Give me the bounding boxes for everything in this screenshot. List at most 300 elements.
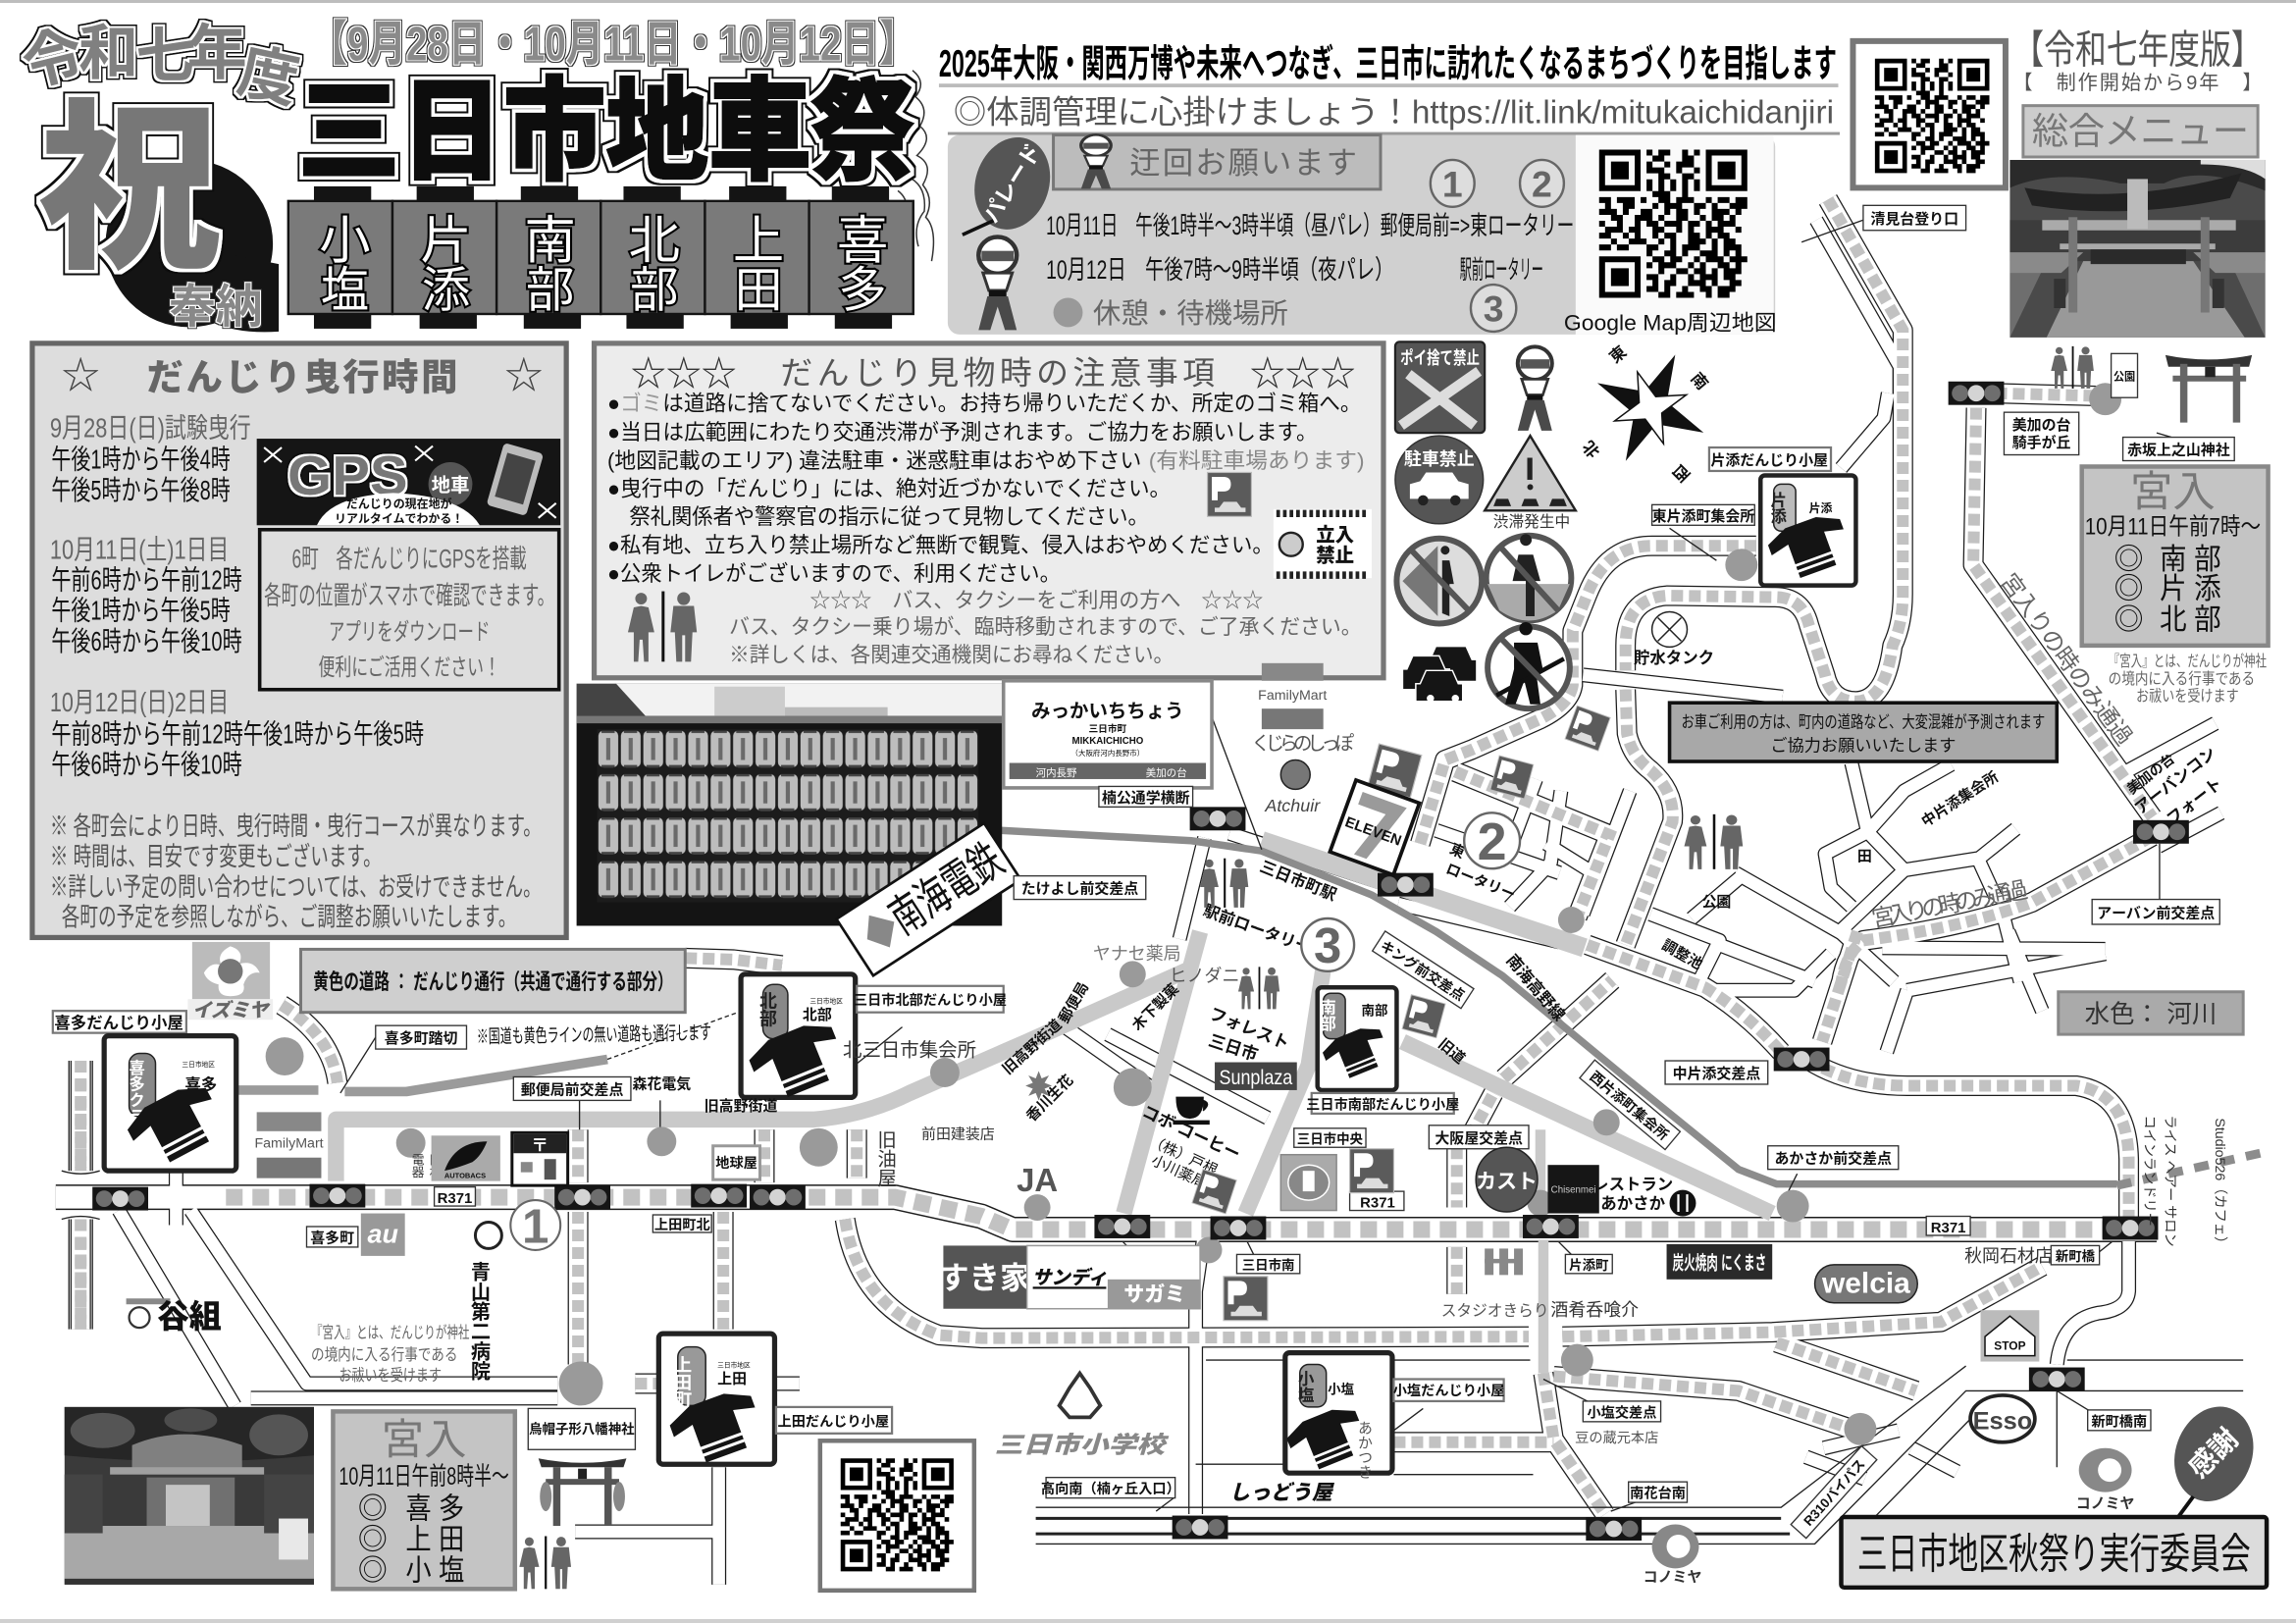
logo: Izumiya: イズミヤ [192, 999, 271, 1021]
panel: miyairi, Nanbu Katazoe Hokubu: ◎ [2114, 603, 2143, 636]
header: six town lanterns: 喜 [837, 213, 888, 270]
header: reiwa 7 arched title: 度 [233, 37, 305, 115]
map: right side labels: 中片添集会所 [1918, 767, 2002, 830]
icon: Akasaka restroom [2051, 346, 2094, 389]
map: central shops and labels: 豆の蔵元本店 [1575, 1431, 1658, 1446]
icon: station restroom [1200, 859, 1248, 908]
map: central shops and labels: 新町橋 [2056, 1248, 2096, 1264]
precautions list: ●曳行中の「だんじり」には、絶対近づかないでください。 [607, 476, 1171, 500]
sign: no entry [1274, 509, 1372, 578]
precautions list: 祭礼関係者や警察官の指示に従って見物してください。 [629, 504, 1149, 529]
labels: rotated map boxes: 南海高野線 [1502, 951, 1569, 1025]
card: Nanbu danjiri: 南部 [1318, 999, 1336, 1031]
map: right side labels: 東片添町集会所 [1652, 507, 1754, 525]
header: six town lanterns: 片 [420, 213, 472, 270]
callout: traffic warning: ご協力お願いいたします [1770, 736, 1956, 756]
map: central shops and labels: しっどう屋 [1229, 1482, 1335, 1504]
GPS info box: 6町 各だんじりにGPSを搭載 [292, 545, 527, 574]
logo: Chikyuya: 地球屋 [715, 1155, 757, 1172]
icon: parade fan [963, 128, 1062, 239]
circled route numbers: 3 [1484, 288, 1504, 329]
schedule title: ☆ [62, 355, 100, 397]
labels: station area: 三日市町駅 [1257, 857, 1339, 905]
card: Kita danjiri: 喜多 [184, 1075, 217, 1094]
panel: miyairi, Nanbu Katazoe Hokubu: 南 部 [2160, 544, 2221, 576]
sign: Mikkaichicho station board: 河内長野 [1036, 766, 1077, 779]
map: right side labels: 公園 [1701, 894, 1731, 911]
note: what miyairi means, right [2109, 653, 2267, 706]
header: celebration character with black circle: 祝 [38, 88, 220, 291]
logo: Esso: Esso [1973, 1407, 2032, 1435]
logo: JA: JA [1017, 1162, 1058, 1198]
map: right side labels: ライス ヘアー サロン [2162, 1115, 2177, 1247]
card: Ueda danjiri [658, 1334, 774, 1470]
schedule: October 11: 午後1時から午後5時 [51, 596, 231, 626]
labels: station area: 楠公通学横断 [1102, 789, 1190, 807]
legend: river [2059, 992, 2243, 1034]
detour heading [1054, 134, 1381, 189]
header: six town lanterns: 北 [629, 213, 680, 270]
map: central shops and labels: 小塩だんじり小屋 [1393, 1383, 1504, 1399]
header: reiwa 7 arched title: 和 [78, 20, 138, 86]
precautions list: ●当日は広範囲にわたり交通渋滞が予測されます。ご協力をお願いします。 [607, 420, 1318, 445]
panel: miyairi, Kita Ueda Koshio: ◎ [358, 1554, 388, 1587]
general menu heading: 総合メニュー [2032, 111, 2249, 152]
map: right side labels: 騎手が丘 [2012, 434, 2071, 451]
schedule notes [50, 812, 542, 931]
panel: top QR code [1852, 41, 2006, 187]
map: central shops and labels: ヤナセ薬局 [1093, 944, 1181, 964]
labels: left map: 喜多町 [310, 1229, 354, 1246]
logo: Nikumasa [1667, 1244, 1772, 1280]
schedule: September 28: 9月28日(日)試験曳行 [50, 413, 251, 444]
icon: post office [512, 1132, 568, 1185]
header: reiwa 7 arched title: 年 [187, 20, 247, 86]
shrine label: Eboshigata Hachiman [528, 1408, 635, 1449]
panel: miyairi, Nanbu Katazoe Hokubu [2082, 466, 2269, 646]
header: celebration character with black circle: 奉納 [169, 282, 263, 334]
map: central shops and labels: 香川生花 [1022, 1072, 1076, 1126]
schedule title: だんじり曳行時間 [147, 357, 458, 398]
logo: Konomiya right [2076, 1448, 2135, 1512]
map: central shops and labels: 高向南（楠ヶ丘入口） [1041, 1481, 1180, 1497]
marker: route point 3 [1301, 917, 1354, 973]
photo: lantern wall [577, 684, 1002, 925]
icon: water tank [1652, 612, 1687, 647]
header: Expo slogan [939, 43, 1838, 87]
legend: yellow road: 黄色の道路 ： だんじり通行（共通で通行する部分） [313, 969, 673, 994]
logo: Sundy and Sagami: サンディ [1032, 1266, 1107, 1288]
panel: miyairi, Nanbu Katazoe Hokubu: ◎ [2114, 544, 2143, 576]
QR code: Google Map [1599, 153, 1748, 295]
circled route numbers: 1 [1442, 163, 1463, 204]
logo: Mikkaichi elementary school [995, 1374, 1170, 1458]
card: Kita danjiri: 三日市地区 [182, 1060, 215, 1069]
labels: left map: 上田町北 [654, 1218, 710, 1233]
header: festival dates: 【9月28日・10月11日・10月12日】 [309, 17, 917, 71]
header: six town lanterns: 上 [733, 213, 784, 270]
logo: Izumiya [187, 942, 273, 1021]
card: Koshio danjiri: 小塩 [1295, 1371, 1314, 1402]
map: FamilyMart near station [1258, 663, 1327, 729]
logo: Welcia: welcia [1821, 1267, 1910, 1299]
sign: no littering [1395, 341, 1485, 433]
map: central shops and labels: 小川薬局 [1149, 1152, 1209, 1192]
map: right side labels: 中片添交差点 [1673, 1065, 1760, 1082]
panel: QR code bottom [820, 1440, 974, 1591]
panel: miyairi, Kita Ueda Koshio: 上 田 [405, 1524, 464, 1556]
parade schedule: 10月12日 午後7時～9時半頃（夜パレ） [1046, 255, 1393, 285]
map: right side labels: 田 [1857, 849, 1872, 865]
card: Ueda danjiri: 上田町 [672, 1355, 692, 1408]
compass rose: 東 [1606, 341, 1631, 367]
sign: Mikkaichicho station board: 美加の台 [1146, 766, 1187, 779]
schedule: October 11: 午前6時から午前12時 [51, 564, 242, 595]
callout: traffic warning [1670, 703, 2057, 761]
legend: yellow road [301, 949, 685, 1013]
sign: no parking: 駐車禁止 [1404, 449, 1475, 469]
schedule: October 11: 午後6時から午後10時 [51, 626, 242, 656]
caption: Google Map: Google Map周辺地図 [1564, 310, 1777, 335]
sign: Nankai Railway: 南海電鉄 [880, 834, 1012, 944]
logo: Chisenmei [1547, 1165, 1599, 1214]
card: Kita-area hut label: 喜多だんじり小屋 [54, 1014, 183, 1032]
sign: no entry: 立入 [1316, 525, 1355, 547]
labels: rotated map boxes: 調整池 [1659, 936, 1705, 973]
labels: station area: ロータリー [1443, 861, 1518, 904]
icon: Forest restroom [1238, 967, 1279, 1009]
marker: route point 1: 1 [522, 1199, 548, 1253]
logo: Sukiya [938, 1245, 1030, 1309]
precautions list [607, 392, 1365, 586]
header: six town lanterns: 塩 [321, 263, 369, 317]
schedule: September 28 [50, 413, 251, 505]
logo: 7-Eleven: ELEVEN [1342, 813, 1403, 850]
map: central shops and labels: ヒノダニ [1170, 966, 1239, 985]
panel: miyairi, Kita Ueda Koshio: 喜 多 [405, 1493, 464, 1526]
map: central shops and labels: 三日市南 [1242, 1257, 1294, 1273]
icon: police officer [978, 236, 1017, 330]
parade schedule: 10月11日 午後1時半～3時半頃（昼パレ）郵便局前=>東ロータリー [1046, 211, 1574, 240]
note: what miyairi means, right: お祓いを受けます [2136, 688, 2239, 706]
labels: station area [1014, 786, 1518, 958]
logo: Autobacs: AUTOBACS [444, 1172, 486, 1180]
header: six town lanterns [288, 186, 913, 329]
logo: Tanigumi [127, 1298, 222, 1335]
schedule title [62, 355, 543, 398]
map: right side labels: フォート [2164, 775, 2225, 828]
map: right side labels: 公園 [2113, 370, 2135, 383]
sign: no entry: 禁止 [1316, 545, 1354, 567]
map: right side labels: 赤坂上之山神社 [2127, 443, 2230, 459]
map: central shops and labels: 秋岡石材店 [1964, 1246, 2053, 1266]
map: yellow festival route (thick roads) [237, 841, 1772, 1374]
labels: left map: 旧高野街道 [704, 1098, 777, 1115]
precautions list: ●公衆トイレがございますので、利用ください。 [607, 561, 1061, 586]
header: reiwa 7 arched title: 七 [135, 23, 196, 89]
panel: miyairi, Nanbu Katazoe Hokubu: 宮入 [2130, 469, 2216, 516]
icon: east restroom [1684, 814, 1743, 869]
header: dragon scroll decoration [898, 71, 933, 261]
labels: left map: 北三日市集会所 [843, 1040, 976, 1062]
precautions title: ☆☆☆ [631, 354, 737, 393]
sign: Mikkaichicho station board: みっかいちちょう [1031, 701, 1184, 722]
panel: miyairi, Kita Ueda Koshio: 宮入 [382, 1417, 466, 1464]
GPS banner: リアルタイムでわかる！ [335, 511, 463, 525]
map: central shops and labels: 新町橋南 [2091, 1413, 2147, 1430]
panel: miyairi, Kita Ueda Koshio: ◎ [358, 1493, 388, 1526]
icon: parking [1208, 472, 1251, 516]
bus and taxi notice: バス、タクシー乗り場が、臨時移動されますので、ご了承ください。 [729, 614, 1362, 639]
map: central shops and labels: 南花台南 [1630, 1486, 1686, 1502]
header: health note and link: ◎体調管理に心掛けましょう！https://lit.link/mitukaichidanjiri [954, 94, 1834, 131]
precautions list: (地図記載のエリア) 違法駐車・迷惑駐車はおやめ下さい [607, 448, 1141, 473]
card: Hokubu danjiri: 北部 [757, 992, 777, 1027]
header: main festival title: 三日市地車祭 [298, 70, 914, 194]
card: Kita danjiri: 喜多クラブ [127, 1059, 145, 1140]
icon: torii right [2166, 355, 2252, 423]
icon: coffee cup [1174, 1097, 1209, 1124]
header: celebration character with black circle [38, 88, 279, 334]
header: six town lanterns: 小 [319, 213, 371, 270]
panel: miyairi, Kita Ueda Koshio: 10月11日午前8時半～ [339, 1463, 509, 1491]
precautions title [631, 354, 1356, 393]
logo: Gusto: カスト [1476, 1171, 1538, 1193]
map: central shops and labels: 大阪屋交差点 [1435, 1129, 1523, 1147]
logo: au: au [368, 1219, 398, 1248]
panel: miyairi, Kita Ueda Koshio: 小 塩 [405, 1554, 464, 1587]
parade schedule: 駅前ロータリー [1460, 255, 1543, 285]
parade schedule [1046, 211, 1574, 285]
map: right side labels: 清見台登り口 [1870, 210, 1958, 228]
map: right side labels [1634, 205, 2234, 1250]
logo: Esso [1970, 1395, 2035, 1442]
labels: rotated map boxes [1373, 931, 1877, 1539]
logo: left FamilyMart: FamilyMart [254, 1135, 324, 1151]
logo: Ministop [1981, 1310, 2039, 1362]
labels: station area: 東 [1447, 841, 1468, 863]
edition label [2012, 26, 2263, 94]
header: six town lanterns: 多 [839, 263, 887, 317]
labels: left map: 上田だんじり小屋 [778, 1414, 889, 1430]
Aoyama second hospital label: 青山第二病院 [467, 1262, 491, 1382]
icon: police officer 2 [1518, 346, 1552, 431]
map: central shops and labels: 旧高野街道 [1000, 1017, 1066, 1077]
precautions list: (有料駐車場あります) [1149, 448, 1365, 473]
label: Akasaka crossing [1768, 1146, 1899, 1170]
precautions title: だんじり見物時の注意事項 [780, 355, 1215, 392]
map: thin leader lines [340, 220, 2171, 1511]
icon: cars in a jam [1402, 647, 1476, 702]
map: central shops and labels: コボ コーヒー [1139, 1101, 1243, 1164]
labels: left map: R371 [438, 1190, 472, 1207]
sign: no littering: ポイ捨て禁止 [1400, 347, 1480, 368]
sign: Nankai Railway [836, 823, 1020, 975]
map: right side labels: アーバンコン [2132, 744, 2219, 818]
GPS banner: 地車 [432, 475, 469, 497]
GPS info box: アプリをダウンロード [329, 619, 490, 646]
header: six town lanterns: 南 [525, 213, 576, 270]
map: central shops and labels [1000, 944, 2151, 1504]
labels: left map [306, 986, 1007, 1434]
map: central shops and labels: 木下製菓 [1129, 981, 1182, 1034]
labels: left map: 郵便局前交差点 [521, 1080, 623, 1098]
map: central shops and labels: R371 [1931, 1220, 1965, 1236]
logo: Chisenmei: Chisenmei [1551, 1185, 1596, 1196]
road: far-left dotted road south of R371 [77, 1220, 84, 1330]
map: central shops and labels: 片添町 [1569, 1258, 1609, 1273]
map: right side labels: 貯水タンク [1634, 650, 1714, 667]
panel: miyairi, Nanbu Katazoe Hokubu: 片 添 [2160, 573, 2221, 605]
bus and taxi notice [729, 588, 1362, 666]
marker: route point 2 [1464, 812, 1520, 871]
sign: no parking [1395, 436, 1484, 524]
icon: parade fan: パレード [978, 139, 1046, 228]
card: Koshio danjiri: あかつき [1356, 1420, 1373, 1479]
GPS banner: だんじりの現在地が [346, 496, 452, 510]
card: Nanbu danjiri [1318, 987, 1396, 1090]
logo: flower shop [1025, 1072, 1052, 1100]
panel: viewing precautions [595, 343, 1383, 678]
logo: Ministop: STOP [1994, 1339, 2026, 1353]
labels: station area: たけよし前交差点 [1021, 880, 1138, 898]
schedule notes: 各町の予定を参照しながら、ご調整お願いいたします。 [62, 902, 516, 931]
note: what miyairi means, right: の境内に入る行事である [2109, 670, 2255, 688]
edition label: 【 制作開始から9年 】 [2012, 72, 2263, 94]
card: Kita danjiri [104, 1036, 236, 1173]
card: Koshio danjiri [1283, 1353, 1392, 1479]
sign: Mikkaichicho station board: 三日市町 [1088, 722, 1127, 735]
legend: river: 水色： 河川 [2085, 1001, 2217, 1028]
road: far-left dotted road north of R371 [77, 1061, 84, 1171]
logo: left FamilyMart [254, 1112, 324, 1178]
logo: Gusto [1476, 1147, 1538, 1212]
map: right side labels: コインランドリー [2141, 1115, 2157, 1227]
compass rose [1577, 334, 1725, 485]
bus and taxi notice: ☆☆☆ バス、タクシーをご利用の方へ ☆☆☆ [809, 588, 1263, 612]
schedule: October 12 [50, 687, 424, 780]
logo: 7-Eleven [1330, 780, 1420, 875]
labels: left map: 旧油屋 [874, 1129, 896, 1187]
icon: post office: 〒 [531, 1136, 548, 1156]
header: reiwa 7 arched title [16, 19, 305, 115]
logo: Mikkaichi elementary school: 三日市小学校 [995, 1432, 1170, 1458]
logo: Sunplaza: Sunplaza [1220, 1067, 1293, 1089]
schedule notes: ※ 各町会により日時、曳行時間・曳行コースが異なります。 [50, 812, 542, 841]
header: six town lanterns: 田 [734, 263, 783, 317]
callout: traffic warning: お車ご利用の方は、町内の道路など、大変混雑が予測されます [1682, 712, 2045, 732]
labels: left map: 喜多町踏切 [385, 1029, 458, 1047]
sign: Mikkaichicho station board: （大阪府河内長野市） [1071, 748, 1144, 758]
panel: miyairi, Kita Ueda Koshio [333, 1411, 515, 1589]
icon: restaurant [1670, 1190, 1696, 1217]
logo: Nikumasa: 炭火焼肉 にくまさ [1673, 1252, 1766, 1274]
map: central shops and labels: あかさか [1600, 1195, 1666, 1213]
map: parking [1565, 706, 1610, 751]
Aoyama second hospital label [467, 1223, 501, 1382]
map: central shops and labels: 三日市 [1206, 1030, 1261, 1065]
marker: route point 2: 2 [1478, 812, 1507, 871]
labels: left map: 前田建装店 [921, 1126, 995, 1142]
note: what miyairi means, left: お祓いを受けます [339, 1367, 442, 1385]
precautions list: ●ゴミは道路に捨てないでください。お持ち帰りいただくか、所定のゴミ箱へ。 [607, 392, 1362, 416]
map: parking near station [1368, 744, 1422, 798]
schedule: October 11 [50, 535, 242, 656]
detour heading: 迂回お願います [1129, 145, 1357, 180]
labels: station area: 駅前ロータリー [1201, 901, 1314, 958]
map: right side labels: 宮入りの時のみ通過 [1995, 569, 2137, 751]
map: parking spots centre [1192, 995, 1445, 1321]
labels: left map: 電器 [410, 1153, 424, 1178]
labels: left map: ※国道も黄色ラインの無い道路も通行します [477, 1022, 711, 1048]
logo: Sukiya: すき家 [938, 1261, 1030, 1295]
icon: Aoyama shrine restroom [519, 1536, 571, 1589]
rest area legend: 休憩・待機場所 [1093, 298, 1288, 330]
logo: Chikyuya [713, 1146, 760, 1179]
map: traffic signals [92, 382, 2189, 1541]
logo: Autobacs [432, 1135, 500, 1181]
labels: left map: 三日市北部だんじり小屋 [854, 992, 1007, 1009]
GPS info box [260, 530, 559, 690]
schedule notes: ※詳しい予定の問い合わせについては、お受けできません。 [50, 872, 542, 902]
fan: thanks: 感謝 [2183, 1423, 2245, 1485]
logo: Konomiya right: コノミヤ [2076, 1495, 2135, 1512]
logo: Tanigumi: 谷組 [157, 1298, 222, 1335]
map: central shops and labels: R371 [1360, 1195, 1395, 1212]
schedule: October 12: 10月12日(日)2日目 [50, 687, 229, 717]
map: right side labels: 美加の台 [2124, 751, 2178, 798]
circled route numbers: 2 [1532, 163, 1552, 204]
sign: traffic jam warning: 渋滞発生中 [1493, 513, 1570, 531]
card: Ueda danjiri: 三日市地区 [717, 1361, 751, 1370]
map: central shops and labels: 三日市南部だんじり小屋 [1306, 1096, 1459, 1113]
labels: left map: 門林 [428, 1153, 442, 1178]
schedule: September 28: 午後1時から午後4時 [51, 445, 231, 475]
map: Nankai railway line [1001, 830, 2117, 1184]
shrine label: Eboshigata Hachiman: 烏帽子形八幡神社 [529, 1421, 635, 1437]
map: right side labels: Studio526（カフェ） [2212, 1118, 2227, 1250]
note: what miyairi means, left [311, 1325, 469, 1385]
map: right side labels: アーバン前交差点 [2097, 904, 2215, 921]
map: right side labels: 宮入りの時のみ通過 [1869, 877, 2030, 933]
sign: traffic jam warning [1485, 436, 1576, 531]
marker: route point 1 [510, 1199, 560, 1253]
card: Koshio danjiri: 小塩 [1328, 1381, 1355, 1396]
logo: Konomiya bottom [1644, 1525, 1701, 1586]
GPS info box: 各町の位置がスマホで確認できます。 [264, 581, 554, 610]
logo: Sundy and Sagami [1027, 1245, 1200, 1309]
labels: rotated map boxes: キング前交差点 [1377, 938, 1468, 1005]
map: rest-area dots [266, 383, 2121, 1445]
map: central shops and labels: フォレスト [1207, 1004, 1292, 1053]
panel: parade detour notice [948, 128, 1777, 335]
schedule: October 12: 午後6時から午後10時 [51, 750, 242, 780]
logo: Sundy and Sagami: サガミ [1123, 1283, 1185, 1306]
schedule: October 12: 午前8時から午前12時午後1時から午後5時 [51, 718, 424, 749]
map: central shops and labels: （株）戸根 [1147, 1133, 1221, 1179]
sign: no smoking while walking [1487, 622, 1570, 708]
marker: route point 3: 3 [1314, 917, 1341, 973]
icon: restrooms [628, 592, 697, 661]
labels: rotated map boxes: 旧道 [1435, 1036, 1468, 1068]
label: Akasaka crossing: あかさか前交差点 [1775, 1150, 1892, 1168]
map: Kujira no Shippo shop: くじらのしっぽ [1251, 733, 1355, 755]
logo: Konomiya bottom: コノミヤ [1644, 1569, 1701, 1586]
precautions title: ☆☆☆ [1250, 354, 1356, 393]
note: what miyairi means, left: の境内に入る行事である [311, 1346, 458, 1364]
GPS info box: 便利にご活用ください！ [318, 654, 500, 681]
header: six town lanterns: 添 [422, 263, 470, 317]
